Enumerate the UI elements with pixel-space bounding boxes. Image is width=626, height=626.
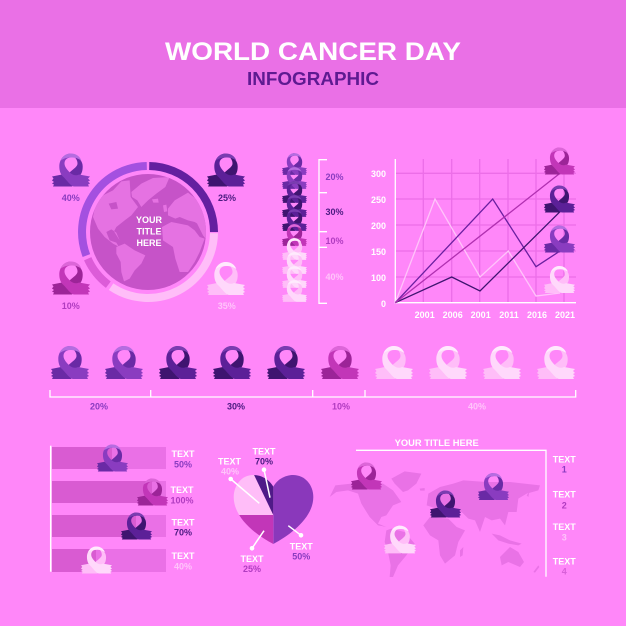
map legend: TEXT: [553, 556, 576, 566]
row labels: 40%: [468, 402, 486, 412]
pie labels: 25%: [243, 564, 261, 574]
x axis labels: 2001: [415, 310, 435, 320]
panel: heart pie chart: [218, 446, 313, 574]
globe title: TITLE: [136, 226, 162, 236]
bar labels: [170, 449, 195, 571]
map bracket: [356, 450, 546, 577]
leader lines: [228, 467, 303, 551]
pie labels: TEXT: [240, 554, 264, 564]
map legend: TEXT: [553, 490, 576, 500]
donut ring segments: [82, 166, 214, 298]
bar ribbons: [81, 445, 168, 573]
map legend: 2: [562, 500, 567, 510]
x axis labels: 2011: [499, 310, 519, 320]
ribbon 10%: [52, 262, 90, 294]
map title: YOUR TITLE HERE: [395, 438, 479, 448]
x axis labels: 2016: [527, 310, 547, 320]
pie labels: 50%: [292, 551, 310, 561]
y axis labels: 250: [371, 195, 386, 205]
panel: stacked ribbon column: [282, 153, 344, 303]
pie labels: TEXT: [290, 541, 313, 551]
map legend: TEXT: [553, 454, 576, 464]
row bracket: [50, 390, 576, 397]
ribbon 35%: [207, 262, 245, 295]
y axis labels: 200: [371, 221, 386, 231]
x axis labels: 2006: [443, 310, 463, 320]
row labels: [90, 402, 486, 412]
label 40%: 40%: [62, 193, 80, 203]
title: WORLD CANCER DAY: [165, 38, 461, 66]
y axis labels: 0: [381, 299, 386, 309]
label 25%: 25%: [218, 193, 236, 203]
ribbon 40%: [52, 154, 90, 186]
bar tracks: [52, 447, 166, 572]
bar axis: [50, 446, 52, 572]
y axis labels: [371, 169, 386, 309]
stack bracket: [319, 160, 327, 303]
bar labels: TEXT: [171, 551, 195, 561]
bays: [109, 202, 118, 209]
x axis labels: 2021: [555, 310, 575, 320]
x axis labels: 2001: [471, 310, 491, 320]
pie labels: 70%: [255, 456, 273, 466]
map legend: TEXT: [553, 522, 576, 532]
bar labels: TEXT: [171, 517, 195, 527]
americas: [330, 471, 425, 577]
grid: [395, 159, 576, 303]
chart ribbons: [544, 148, 575, 293]
globe title: [136, 215, 162, 248]
row labels: 30%: [227, 402, 245, 412]
y axis labels: 100: [371, 273, 386, 283]
pie labels: [218, 446, 313, 574]
heart left slices: [234, 475, 274, 544]
map legend: 4: [562, 567, 567, 577]
stack labels: [325, 172, 344, 282]
axes: [395, 159, 576, 303]
pie labels: TEXT: [252, 446, 276, 456]
stack labels: 30%: [325, 207, 344, 217]
bar labels: 70%: [174, 528, 192, 538]
panel: globe donut chart: [52, 154, 245, 311]
stack labels: 10%: [325, 236, 344, 246]
map ribbons: [351, 463, 509, 553]
label 35%: 35%: [218, 301, 236, 311]
bar labels: 50%: [174, 459, 192, 469]
label 10%: 10%: [62, 301, 80, 311]
map legend: 1: [562, 464, 567, 474]
x axis labels: [415, 310, 575, 320]
ribbon stack: [282, 153, 307, 302]
bar labels: 40%: [174, 561, 192, 571]
heart right half: [273, 475, 313, 544]
stack labels: 20%: [325, 172, 344, 182]
panel: line chart: [371, 148, 576, 320]
pie labels: TEXT: [218, 456, 241, 466]
y axis labels: 300: [371, 169, 386, 179]
row labels: 10%: [332, 402, 350, 412]
ribbons: [51, 346, 575, 379]
map legend: 3: [562, 532, 567, 542]
pie labels: 40%: [221, 466, 239, 476]
old world: [423, 480, 540, 573]
header band: [0, 0, 626, 108]
panel: horizontal bars: [51, 445, 195, 573]
stack labels: 40%: [325, 272, 344, 282]
globe title: YOUR: [136, 215, 162, 225]
globe: [90, 174, 211, 290]
ribbon 25%: [207, 154, 245, 186]
globe title: HERE: [136, 238, 162, 248]
world map: [330, 471, 540, 577]
panel: ribbon row: [50, 346, 576, 412]
data lines: [395, 173, 560, 303]
bar fills: [52, 447, 152, 572]
bar labels: TEXT: [170, 485, 194, 495]
y axis labels: 150: [371, 247, 386, 257]
panel: world map: [330, 438, 576, 577]
bar labels: 100%: [170, 495, 194, 505]
bar labels: TEXT: [171, 449, 195, 459]
row labels: 20%: [90, 402, 108, 412]
subtitle: INFOGRAPHIC: [247, 69, 379, 89]
map legend: [553, 454, 576, 577]
